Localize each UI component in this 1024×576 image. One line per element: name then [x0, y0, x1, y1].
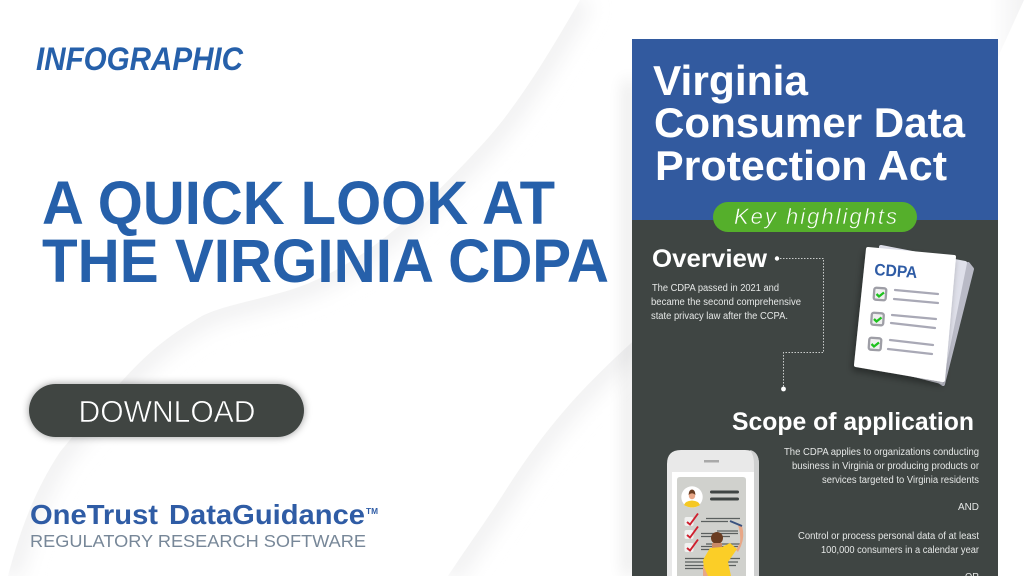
- scope text: [784, 447, 980, 576]
- infographic title: Virginia: [653, 57, 809, 104]
- logo: OneTrust DataGuidance: REGULATORY RESEARCH SOFTWARE: [30, 531, 366, 551]
- key highlights pill: [713, 202, 917, 232]
- panel header: [632, 39, 998, 220]
- main heading: A QUICK LOOK AT: [42, 169, 555, 237]
- icon: CDPA checklist document: CDPA: [874, 261, 918, 282]
- scope heading: Scope of application: [732, 408, 974, 436]
- panel side shadow: [624, 80, 634, 576]
- person: [703, 521, 743, 576]
- overview text: state privacy law after the CCPA.: [651, 311, 788, 322]
- scope text: The CDPA applies to organizations conducting: [784, 447, 979, 458]
- overview heading: Overview: [652, 245, 768, 273]
- checkbox rows: [869, 288, 886, 350]
- scope text: business in Virginia or producing products or: [792, 461, 980, 472]
- panel: infographic preview: [632, 39, 998, 576]
- key highlights pill: Key highlights: [734, 204, 897, 229]
- infographic title: Consumer Data: [654, 99, 966, 146]
- label: INFOGRAPHIC: INFOGRAPHIC: [36, 41, 244, 77]
- download button: [29, 384, 304, 437]
- main heading: THE VIRGINIA CDPA: [42, 227, 609, 295]
- logo: OneTrust DataGuidance: DataGuidance: [169, 499, 365, 530]
- overview text: The CDPA passed in 2021 and: [652, 283, 779, 294]
- infographic title: [653, 57, 966, 189]
- scope text: Control or process personal data of at least: [798, 531, 979, 542]
- scope text: 100,000 consumers in a calendar year: [821, 545, 980, 556]
- icon: phone with checklist and person: [667, 450, 759, 576]
- main heading: [42, 169, 609, 295]
- logo: OneTrust DataGuidance: [30, 499, 378, 551]
- overview text: became the second comprehensive: [651, 297, 802, 308]
- scope text: AND: [958, 502, 979, 513]
- scope text: services targeted to Virginia residents: [822, 475, 979, 486]
- infographic title: Protection Act: [655, 142, 947, 189]
- checklist lines: [685, 518, 740, 568]
- icon: CDPA checklist document: [856, 247, 972, 384]
- logo: OneTrust DataGuidance: OneTrust: [30, 499, 158, 530]
- logo: OneTrust DataGuidance: TM: [366, 507, 378, 516]
- download button: DOWNLOAD: [78, 394, 256, 429]
- dotted connector: [775, 256, 824, 391]
- avatar: [681, 486, 703, 508]
- overview text: [651, 283, 802, 322]
